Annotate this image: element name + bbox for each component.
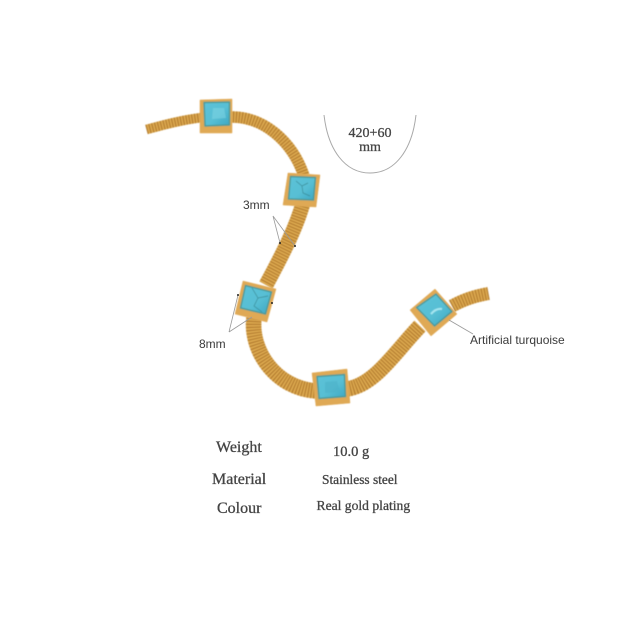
callout: artificial turquoise: Artificial turquoise: [470, 333, 565, 347]
callout: artificial turquoise: [449, 320, 565, 347]
pendant: block 1: [200, 99, 232, 133]
spec: weight: Weight: [216, 439, 262, 456]
callout: 3mm: 3mm: [243, 198, 270, 212]
spec: colour: [217, 498, 410, 517]
spec: colour: Colour: [217, 500, 262, 517]
length curve: [324, 115, 416, 173]
callout: 8mm: 8mm: [199, 337, 226, 351]
spec: material: Material: [212, 471, 267, 488]
length label: 420+60: [349, 126, 391, 141]
pendant: block 5: [410, 289, 457, 336]
length unit: mm: [359, 140, 381, 155]
spec: material: Stainless steel: [322, 472, 398, 487]
spec: weight: 10.0 g: [333, 444, 369, 460]
pendant: block 3: [235, 281, 276, 322]
necklace chain: [146, 117, 488, 391]
pendant: block 4: [312, 369, 350, 406]
spec: colour: Real gold plating: [316, 498, 410, 513]
pendant: block 2: [283, 173, 320, 207]
spec: weight: [216, 439, 369, 460]
spec: material: [212, 471, 398, 488]
callout: 3mm: [243, 198, 296, 247]
callout: 8mm: [199, 294, 273, 351]
